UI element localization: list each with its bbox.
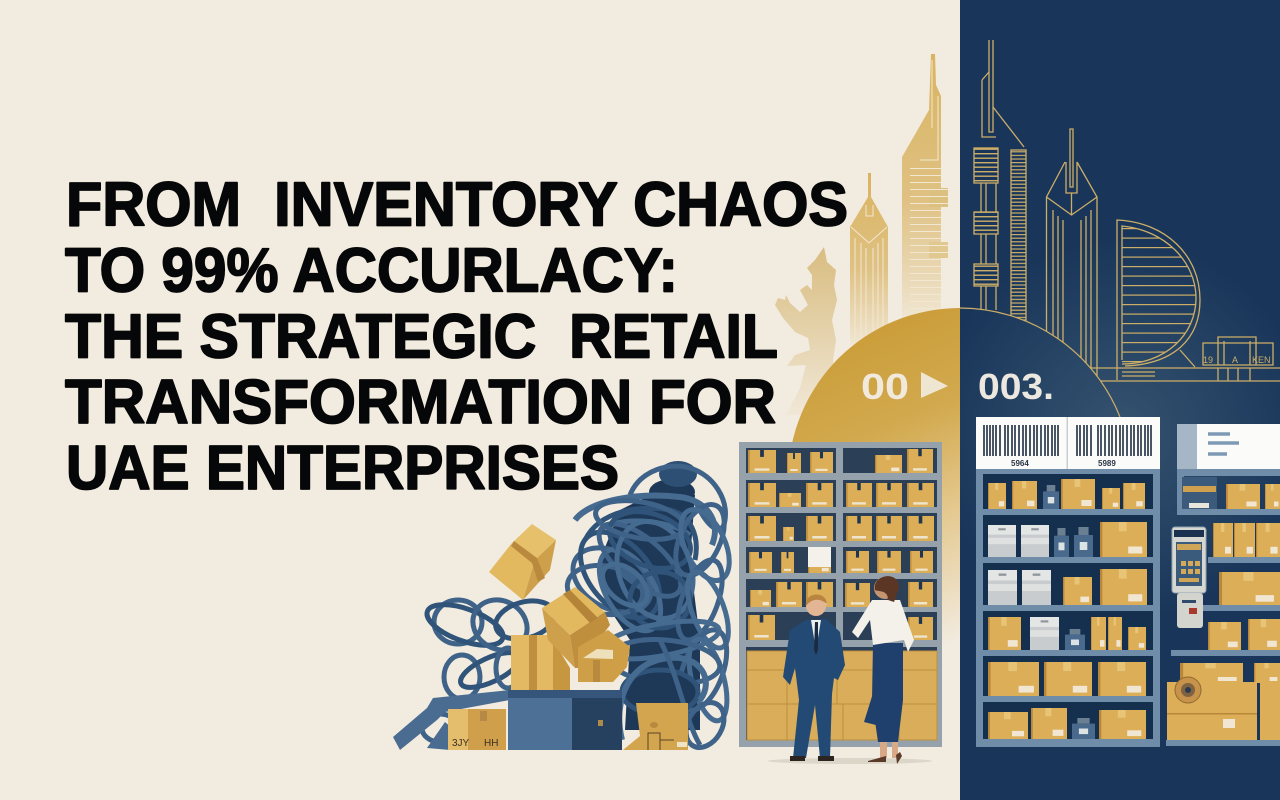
- shelf boxes: [748, 449, 934, 640]
- tangle core: [600, 490, 700, 730]
- line ground and low building: 19: [1203, 355, 1213, 365]
- front box right: [623, 703, 688, 750]
- line tower B: [1046, 129, 1097, 380]
- tangled ribbons: [422, 466, 739, 754]
- front box left: 3JY: [452, 738, 470, 749]
- progress label: 003.: 003.: [978, 366, 1054, 407]
- mid gold tower: [850, 173, 888, 345]
- line crescent hotel: [1117, 220, 1200, 380]
- blue crate: [508, 690, 622, 750]
- title: TRANSFORMATION FOR: [65, 368, 776, 437]
- barcode 2: [1077, 425, 1151, 456]
- broken conveyor: [393, 690, 510, 750]
- tape roll: [1175, 677, 1201, 703]
- right-hand shelving: [1166, 424, 1280, 746]
- line ground and low building: [1090, 337, 1280, 381]
- shelf boards: [1166, 557, 1280, 746]
- line tower A: [974, 40, 1026, 320]
- header card: [1177, 424, 1280, 469]
- line ground and low building: KEN: [1252, 355, 1271, 365]
- barcode 1: [984, 425, 1058, 456]
- lower stacked boxes: [747, 651, 937, 740]
- semicircle: navy half: [960, 308, 1132, 652]
- figure: floor shadow: [768, 758, 932, 764]
- semicircle: gold arc outline: [960, 308, 1120, 417]
- handheld scanner: [1172, 527, 1206, 628]
- tangle head: [649, 461, 697, 505]
- large box: [511, 635, 570, 690]
- box with flap: [578, 630, 630, 682]
- progress label: 00: 00: [861, 366, 909, 407]
- blue shelf frame: [976, 469, 1160, 747]
- line ground and low building: A: [1232, 355, 1238, 365]
- shelf boards: [983, 509, 1153, 702]
- figure: man in suit: [783, 594, 845, 761]
- front box left: HH: [484, 738, 498, 749]
- title: FROM INVENTORY CHAOS: [66, 170, 848, 240]
- stock: [1167, 484, 1280, 740]
- white label: [976, 417, 1160, 469]
- tilted box top: [489, 524, 556, 600]
- barcode number 1: 5964: [1011, 459, 1029, 468]
- tilted box middle: [542, 587, 610, 668]
- icon: play arrow: [921, 372, 948, 398]
- title: TO 99% ACCURLACY:: [65, 236, 678, 306]
- barcode number 2: 5989: [1098, 459, 1116, 468]
- illustration: tangled belts and boxes: [393, 461, 739, 754]
- illustration: ordered gray shelving: [739, 442, 942, 747]
- tall gold tower: [902, 54, 948, 320]
- figure: woman in white shirt: [852, 576, 914, 764]
- panel: cream background: [0, 0, 960, 800]
- front box left: [448, 709, 506, 750]
- title: THE STRATEGIC RETAIL: [65, 302, 778, 372]
- dancer silhouette: [775, 247, 837, 415]
- screen panel: [1182, 477, 1217, 509]
- semicircle: gold half: [788, 308, 960, 652]
- title: [65, 170, 848, 503]
- barcode label panel: [976, 417, 1160, 469]
- shelf frame: [739, 442, 942, 747]
- line-art skyline: [974, 40, 1280, 381]
- title: UAE ENTERPRISES: [66, 434, 619, 503]
- organised blue shelving: [976, 469, 1160, 747]
- right shelf frame: [1177, 469, 1280, 515]
- header text lines: [1208, 434, 1239, 454]
- panel: navy background: [960, 0, 1280, 800]
- shelf bays: [746, 448, 937, 740]
- gold skyline: [775, 54, 948, 415]
- shelf stock: [988, 479, 1147, 739]
